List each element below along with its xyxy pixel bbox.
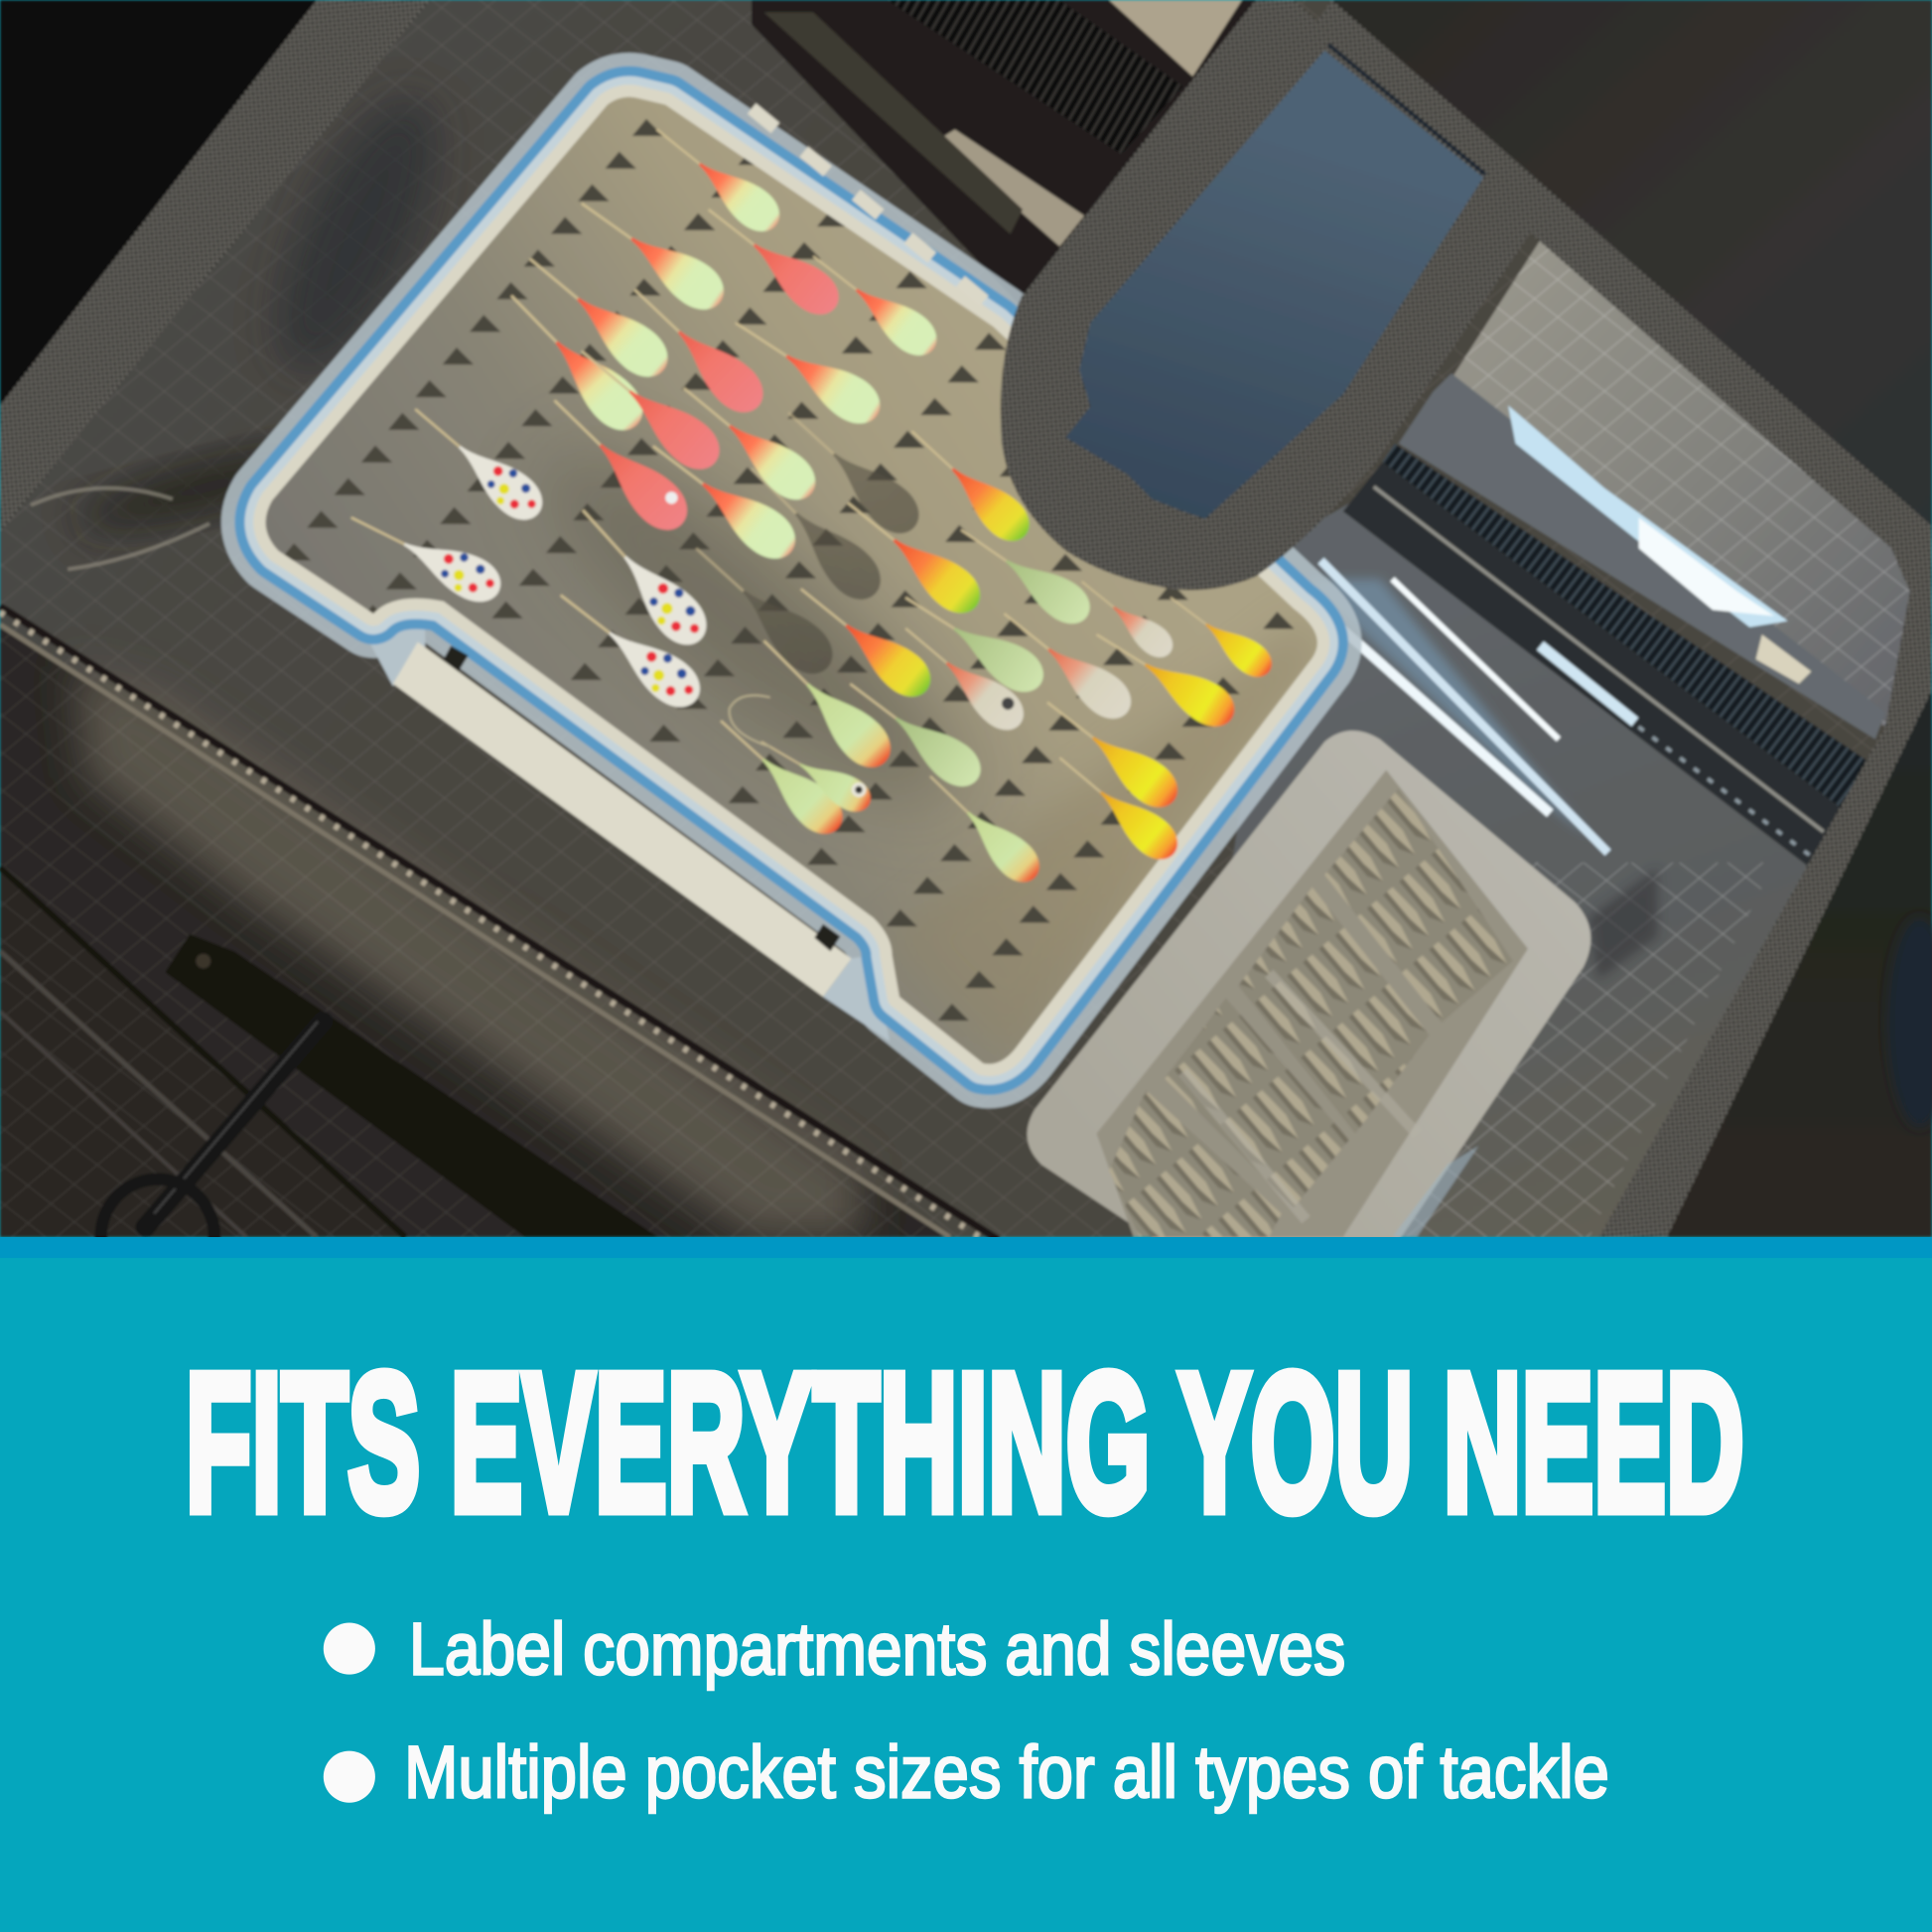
- velcro strap: blue panel: [1066, 51, 1483, 518]
- black strap and cord: [93, 934, 657, 1237]
- jigs: dark shadowed: [681, 396, 929, 685]
- dark band below zipper: [1343, 462, 1845, 869]
- sinker compartment: [1097, 770, 1528, 1237]
- top zipper strips behind box: [752, 0, 1257, 308]
- jigs: coral: [538, 193, 848, 541]
- clear plastic behind latch bar: [363, 610, 890, 1041]
- photo: tackle bag with jig box and sinker box: [0, 0, 1932, 1293]
- lower fabric panel below seam: [0, 624, 950, 1237]
- blue divider stripe: [0, 1237, 1932, 1258]
- shiny band above zipper: [1399, 373, 1885, 740]
- beaded seam: [0, 607, 998, 1241]
- jig box hinges: [752, 108, 1001, 314]
- bag fabric body: [0, 0, 1932, 1237]
- white latch bar: [393, 642, 852, 997]
- right and top piping: [1307, 0, 1932, 1237]
- jigs: white with red head: [894, 570, 1179, 739]
- jigs: pale green and red tip: [707, 513, 1098, 891]
- top left piping: [0, 0, 430, 532]
- jig box rim and gasket: [266, 97, 1317, 1064]
- lower left pockets: [0, 868, 405, 1237]
- jigs: yellow: [1035, 585, 1279, 869]
- jigs: multicolour: [787, 417, 1038, 707]
- lower clear pocket with grid: [1232, 492, 1824, 1237]
- bullet 2: Multiple pocket sizes for all types of tackle: [404, 1731, 1609, 1814]
- jigs: white polka dot: [342, 393, 717, 718]
- small sinker box: [1028, 731, 1590, 1251]
- jig box tray with holes: [246, 73, 1355, 1084]
- velcro strap: woven binding: [1001, 0, 1538, 590]
- jigs: red head, green body: [494, 114, 945, 569]
- dark table background: [0, 0, 1932, 1237]
- bullet 1: Label compartments and sleeves: [409, 1608, 1345, 1691]
- teal text panel: [0, 1258, 1932, 1932]
- upper clear window with grid: [1448, 240, 1913, 727]
- zipper: [1382, 444, 1866, 811]
